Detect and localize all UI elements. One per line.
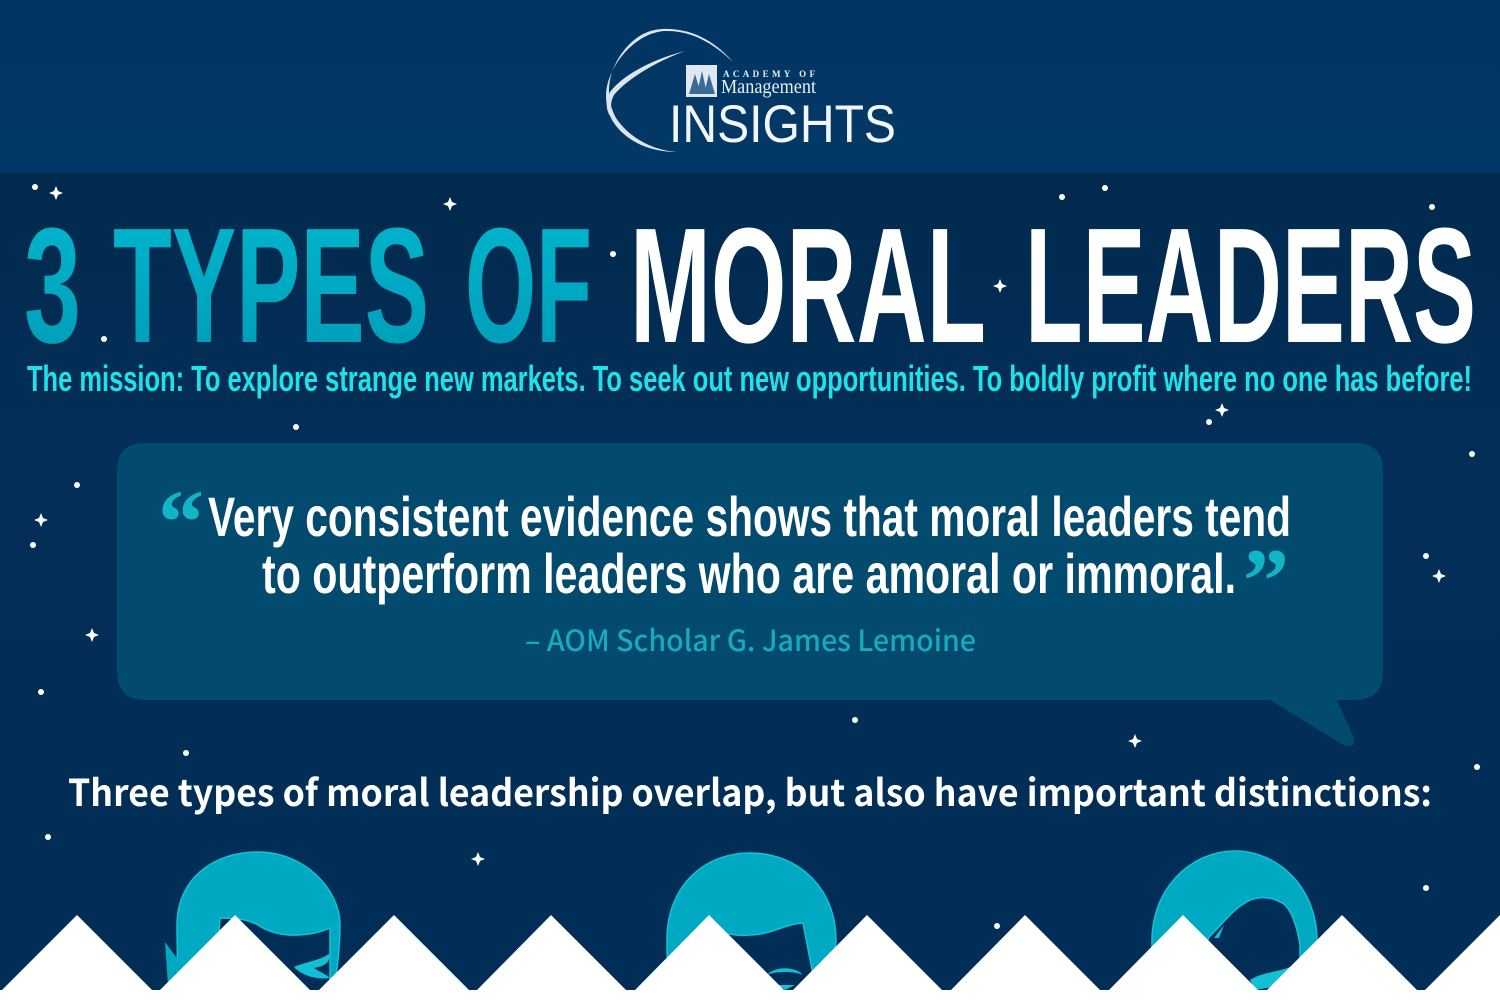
stars <box>30 184 1480 929</box>
hair <box>1152 851 1317 990</box>
title part: moral leaders: MORAL <box>630 194 986 377</box>
hair <box>667 853 836 990</box>
logo: Academy of Management Insights <box>606 29 896 154</box>
eyebrow <box>767 968 803 990</box>
sliver <box>1214 925 1224 938</box>
title part: 3 types of: 3 <box>24 194 81 377</box>
logo swoosh arcs <box>606 29 733 152</box>
title part: 3 types of: TYPES <box>113 194 429 377</box>
logo emblem <box>686 65 717 97</box>
leader portrait 1 <box>165 852 340 990</box>
eyebrow <box>294 953 330 979</box>
logo wordmark small: ACADEMY OF <box>723 69 816 79</box>
quote attribution: – AOM Scholar G. James Lemoine <box>525 618 976 660</box>
leader portrait 2 <box>667 853 836 990</box>
intro sentence: Three types of moral leadership overlap, but also have important distinctions: <box>68 763 1432 817</box>
leader portrait 3 <box>1152 851 1317 990</box>
header band <box>0 0 1500 173</box>
closing quotation mark: ” <box>1243 530 1289 632</box>
white zigzag edge <box>0 915 1500 1000</box>
title part: 3 types of: OF <box>465 194 592 377</box>
title <box>24 194 1476 377</box>
opening quotation mark: “ <box>158 471 204 573</box>
eyebrow <box>1250 966 1292 990</box>
hair <box>177 852 340 990</box>
bubble shape <box>117 443 1383 746</box>
panel: quote speech bubble <box>117 443 1383 746</box>
logo wordmark management: Management <box>721 76 816 98</box>
ear <box>165 942 182 985</box>
logo wordmark insights: INSIGHTS <box>669 95 896 154</box>
